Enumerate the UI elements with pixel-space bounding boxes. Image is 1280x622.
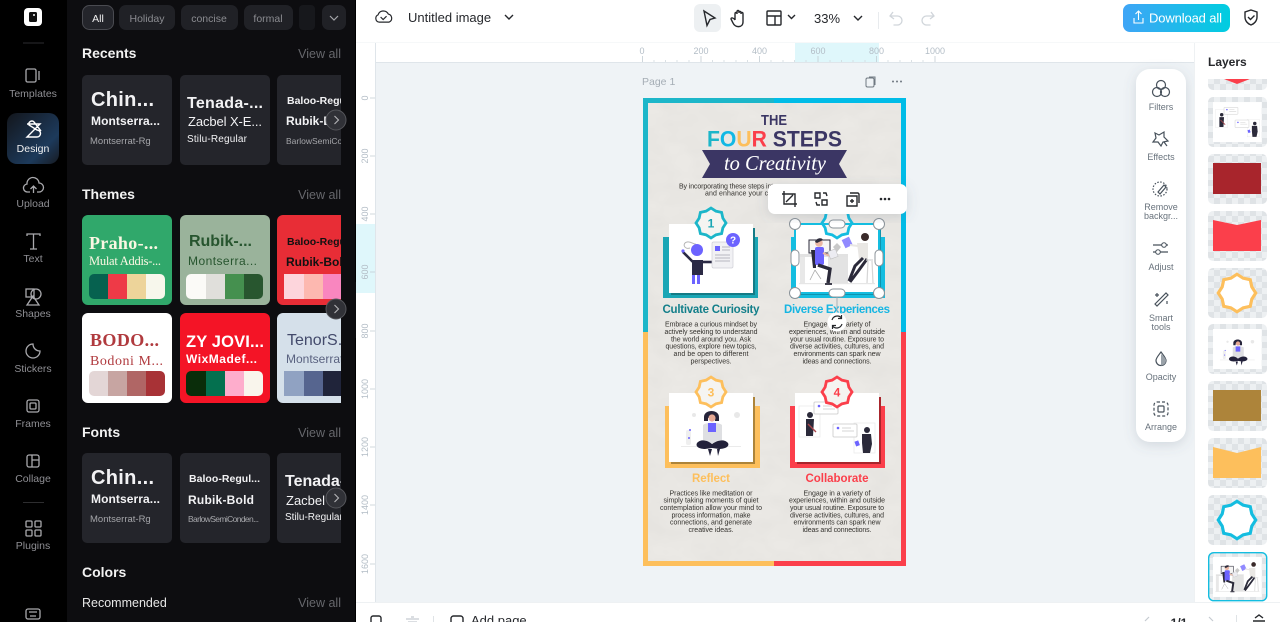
vertical ruler: 800 xyxy=(360,323,370,339)
rail item: templates xyxy=(9,69,57,100)
layout tool xyxy=(767,11,795,25)
rail item: shapes: Shapes xyxy=(15,308,51,320)
page header xyxy=(642,76,902,88)
layer: reflect image xyxy=(1208,324,1267,374)
layer: red ribbon tip xyxy=(1208,79,1267,90)
design side panel xyxy=(67,0,355,622)
fonts cards xyxy=(82,453,341,543)
rail item: text xyxy=(23,234,43,265)
pager xyxy=(1145,616,1213,622)
carousel arrow: themes xyxy=(326,299,346,319)
tool: remove background: backgr... xyxy=(1144,211,1178,221)
rail item: stickers xyxy=(14,344,52,375)
icon: more xyxy=(880,198,890,200)
rail item: collage xyxy=(15,455,51,485)
body 2: diverse activities, cultures, and xyxy=(790,344,884,350)
heading 1: Cultivate Curiosity xyxy=(662,304,760,316)
fonts cards: Zacbel X-Extra xyxy=(286,493,373,508)
fonts cards: Tenada-Regular xyxy=(285,473,405,490)
canvas background xyxy=(356,43,1194,602)
top toolbar xyxy=(356,0,1280,44)
download all button xyxy=(1123,4,1230,32)
poster title xyxy=(707,113,842,152)
body 1: actively seeking to understand xyxy=(664,329,758,336)
body 3: Practices like meditation or xyxy=(670,490,753,497)
vertical ruler xyxy=(356,43,376,602)
intro text: and enhance your creativity xyxy=(705,191,794,198)
download all button: Download all xyxy=(1149,10,1222,26)
body 2: environments can spark new xyxy=(794,351,881,358)
vertical ruler: 400 xyxy=(360,206,370,222)
heading: fonts: View all xyxy=(298,426,341,440)
rail item: templates: Templates xyxy=(9,88,57,100)
body 2: your usual routine. Exposure to xyxy=(790,336,884,344)
tool: adjust xyxy=(1148,243,1174,272)
zoom level xyxy=(814,11,862,26)
horizontal ruler: 200 xyxy=(693,46,709,56)
title ribbon xyxy=(702,150,847,178)
theme: rubik xyxy=(180,215,270,305)
filter chips: formal xyxy=(253,13,283,25)
layer: yellow badge xyxy=(1208,268,1267,318)
step 3: reflect xyxy=(660,377,762,534)
tool: opacity: Opacity xyxy=(1146,372,1177,382)
vertical ruler: 0 xyxy=(360,95,370,101)
fonts cards: Montserrat-Rg xyxy=(90,514,151,525)
recommended row xyxy=(82,596,341,610)
body 2: Engage in a variety of xyxy=(804,322,871,328)
horizontal ruler xyxy=(356,43,1194,63)
recents cards: Baloo-Regular xyxy=(287,95,359,107)
theme: praho: Mulat Addis-... xyxy=(89,254,161,268)
horizontal ruler: 400 xyxy=(752,46,767,56)
heading 2: Diverse Experiences xyxy=(784,304,890,316)
filter chips xyxy=(82,5,346,30)
badge 2 xyxy=(822,208,852,238)
poster xyxy=(643,98,906,566)
body 3: contemplation allow your mind to xyxy=(660,505,762,512)
layer: dark red rectangle xyxy=(1208,154,1267,204)
body 3: process information, make xyxy=(672,512,751,519)
recents cards: Montserrat-Rg xyxy=(90,136,151,147)
floating image toolbar xyxy=(768,184,907,214)
layer thumbnails xyxy=(1208,40,1267,601)
body 3: simply taking moments of quiet xyxy=(664,498,759,504)
tool: effects: Effects xyxy=(1147,152,1175,162)
fonts cards: Baloo-Regul... xyxy=(189,473,260,485)
body 4: your usual routine. Exposure to xyxy=(790,505,884,512)
shield icon xyxy=(1245,10,1257,25)
badge 1 xyxy=(696,208,726,238)
body 1 xyxy=(664,322,758,366)
icon: delete page xyxy=(406,617,419,622)
rail item: frames: Frames xyxy=(15,418,51,430)
badge 4: 4 xyxy=(834,386,841,400)
icon: collapse pages xyxy=(1253,615,1265,621)
body 4: Engage in a variety of xyxy=(804,490,871,497)
tool: remove background: Remove xyxy=(1144,202,1178,212)
rail item: upload xyxy=(16,177,50,210)
right tools panel xyxy=(1136,69,1186,442)
theme: rubik: Montserra... xyxy=(188,254,257,268)
recents cards xyxy=(82,75,341,165)
vertical ruler: 1000 xyxy=(360,379,370,399)
fonts cards: Chin... xyxy=(91,467,154,489)
theme: tenor: Montserrat xyxy=(286,352,344,366)
step 4: collaborate xyxy=(789,377,885,534)
body 4: environments can spark new xyxy=(794,520,881,527)
tool: arrange xyxy=(1145,402,1177,432)
left icon rail xyxy=(0,0,67,622)
paper background xyxy=(648,103,901,561)
heading: themes: View all xyxy=(298,188,341,202)
vertical ruler: 200 xyxy=(360,148,370,164)
tool: filters xyxy=(1149,80,1174,112)
body 4: experiences, within and outside xyxy=(789,498,885,504)
heading: fonts xyxy=(82,424,341,440)
heading: themes: Themes xyxy=(82,186,135,202)
recents cards: Chin... xyxy=(91,89,154,111)
body 1: Embrace a curious mindset by xyxy=(665,322,758,328)
horizontal ruler: 1000 xyxy=(925,46,945,56)
theme: bodoni: Bodoni M... xyxy=(90,354,163,369)
icon: duplicate xyxy=(847,193,859,206)
recents cards: Montserra... xyxy=(91,114,160,128)
theme: zy jovi: ZY JOVI... xyxy=(186,333,264,351)
badge 3 xyxy=(696,377,726,407)
layer: collaborate image xyxy=(1208,97,1267,147)
carousel arrow: fonts xyxy=(326,488,346,508)
theme: baloo: Baloo-Regular xyxy=(287,236,359,248)
keyboard icon xyxy=(26,609,40,619)
card 4 illustration xyxy=(790,393,885,468)
rail item: plugins xyxy=(16,521,50,552)
theme: baloo xyxy=(277,215,341,305)
tool: smart tools: tools xyxy=(1151,322,1171,332)
theme: tenor xyxy=(277,313,341,403)
layer: selected diverse image xyxy=(1209,553,1267,601)
theme: tenor: TenorS... xyxy=(287,332,351,349)
body 3: creative ideas. xyxy=(688,527,734,534)
select tool xyxy=(694,4,721,32)
body 4: ideas and connections. xyxy=(802,527,872,534)
theme: praho: Praho-... xyxy=(89,233,158,253)
layers panel xyxy=(1194,40,1280,602)
fonts cards: Stilu-Regular xyxy=(285,512,343,523)
heading: fonts: Fonts xyxy=(82,424,120,440)
fonts cards: BarlowSemiConden... xyxy=(188,514,259,524)
icon: replace xyxy=(815,193,827,205)
filter chips: All xyxy=(92,13,104,25)
body 1: the world around you. Ask xyxy=(671,336,752,344)
heading: recents: Recents xyxy=(82,45,137,61)
body 4 xyxy=(789,490,885,534)
tool: smart tools: Smart xyxy=(1149,313,1173,323)
recents cards: Rubik-Bold xyxy=(286,114,350,128)
horizontal ruler: 800 xyxy=(869,46,884,56)
layer: cyan badge xyxy=(1208,495,1267,545)
heading: colors: Colors xyxy=(82,564,127,580)
theme: rubik: Rubik-... xyxy=(189,233,252,250)
vertical ruler: 1600 xyxy=(360,554,370,574)
body 2: ideas and connections. xyxy=(802,358,872,366)
panel collapse handle xyxy=(355,0,362,622)
theme: bodoni: BODO... xyxy=(90,330,159,350)
heading 4: Collaborate xyxy=(806,473,868,485)
recents cards: BarlowSemiCondensed xyxy=(286,136,375,146)
fonts cards: Rubik-Bold xyxy=(188,493,254,507)
theme: bodoni xyxy=(82,313,172,403)
tool: adjust: Adjust xyxy=(1148,262,1174,272)
step 1: cultivate curiosity xyxy=(662,208,760,366)
page header: Page 1 xyxy=(642,76,675,88)
poster title: THE xyxy=(761,113,787,129)
recents cards: Tenada-... xyxy=(187,95,263,112)
step 2: diverse experiences xyxy=(784,208,890,366)
cloud saved icon xyxy=(376,11,392,22)
heading: themes xyxy=(82,186,341,202)
tool: remove background xyxy=(1144,182,1178,221)
body 3: connections, and generate xyxy=(670,520,752,527)
poster border xyxy=(643,98,906,566)
filter chips: concise xyxy=(191,13,227,25)
rail item: stickers: Stickers xyxy=(14,363,52,375)
body 2 xyxy=(789,322,885,366)
vertical ruler: 600 xyxy=(360,264,370,280)
rail item: plugins: Plugins xyxy=(16,540,50,552)
themes cards xyxy=(82,215,367,403)
badge 4 xyxy=(822,377,852,407)
title ribbon: to Creativity xyxy=(724,151,827,175)
card 1 illustration xyxy=(663,224,758,298)
vertical ruler: 1200 xyxy=(360,437,370,457)
recents cards: Zacbel X-E... xyxy=(188,114,262,129)
rail item: design: Design xyxy=(17,143,50,155)
rotate handle xyxy=(828,312,846,332)
horizontal ruler: 600 xyxy=(810,46,826,56)
icon: crop xyxy=(782,191,797,207)
tool: opacity xyxy=(1146,352,1177,382)
intro text xyxy=(679,184,794,198)
body 3 xyxy=(660,490,762,534)
filter chips: Holiday xyxy=(129,13,165,25)
rail item: design xyxy=(7,113,59,164)
theme: praho xyxy=(82,215,172,305)
vertical ruler: 1400 xyxy=(360,495,370,515)
theme: baloo: Rubik-Bold xyxy=(286,255,350,269)
intro text: By incorporating these steps into xyxy=(679,184,777,190)
heading: recents xyxy=(82,45,341,61)
tool: filters: Filters xyxy=(1149,102,1174,112)
heading: recents: View all xyxy=(298,47,341,61)
horizontal ruler: 0 xyxy=(639,46,645,56)
layer: yellow envelope xyxy=(1208,438,1267,488)
layer: brown rectangle xyxy=(1208,381,1267,431)
tool: smart tools xyxy=(1149,293,1173,332)
rail item: text: Text xyxy=(23,253,43,265)
body 4: diverse activities, cultures, and xyxy=(790,512,884,519)
rail item: frames xyxy=(15,400,51,430)
rail item: shapes xyxy=(15,289,51,320)
card 2 illustration xyxy=(791,224,885,298)
theme: zy jovi xyxy=(180,313,270,403)
body 1: questions, explore new topics, xyxy=(666,344,757,350)
app logo xyxy=(24,8,42,26)
hand tool xyxy=(731,10,743,27)
rail item: collage: Collage xyxy=(15,473,51,485)
recommended row: View all xyxy=(298,596,341,610)
recommended row: Recommended xyxy=(82,596,167,610)
icon: copy page xyxy=(371,616,381,622)
badge 1: 1 xyxy=(708,216,715,230)
poster title: FOUR STEPS xyxy=(707,127,842,152)
carousel arrow: recents xyxy=(326,110,346,130)
undo redo xyxy=(890,12,934,25)
theme: zy jovi: WixMadef... xyxy=(186,352,257,366)
badge 3: 3 xyxy=(708,386,715,400)
fonts cards: Montserra... xyxy=(91,492,160,506)
layers heading: Layers xyxy=(1208,55,1247,69)
body 1: perspectives. xyxy=(690,358,732,366)
heading 3: Reflect xyxy=(692,473,730,485)
tool: arrange: Arrange xyxy=(1145,422,1177,432)
card 3 illustration xyxy=(665,393,760,468)
body 2: experiences, within and outside xyxy=(789,329,885,336)
zoom level: 33% xyxy=(814,11,840,26)
tool: effects xyxy=(1147,132,1175,162)
recents cards: Stilu-Regular xyxy=(187,134,248,145)
layer: red envelope xyxy=(1208,211,1267,261)
rail item: upload: Upload xyxy=(16,198,50,210)
document title: Untitled image xyxy=(408,10,491,25)
selection frame xyxy=(790,218,884,332)
bottom bar xyxy=(356,602,1280,622)
body 1: and be open to different xyxy=(674,351,749,358)
